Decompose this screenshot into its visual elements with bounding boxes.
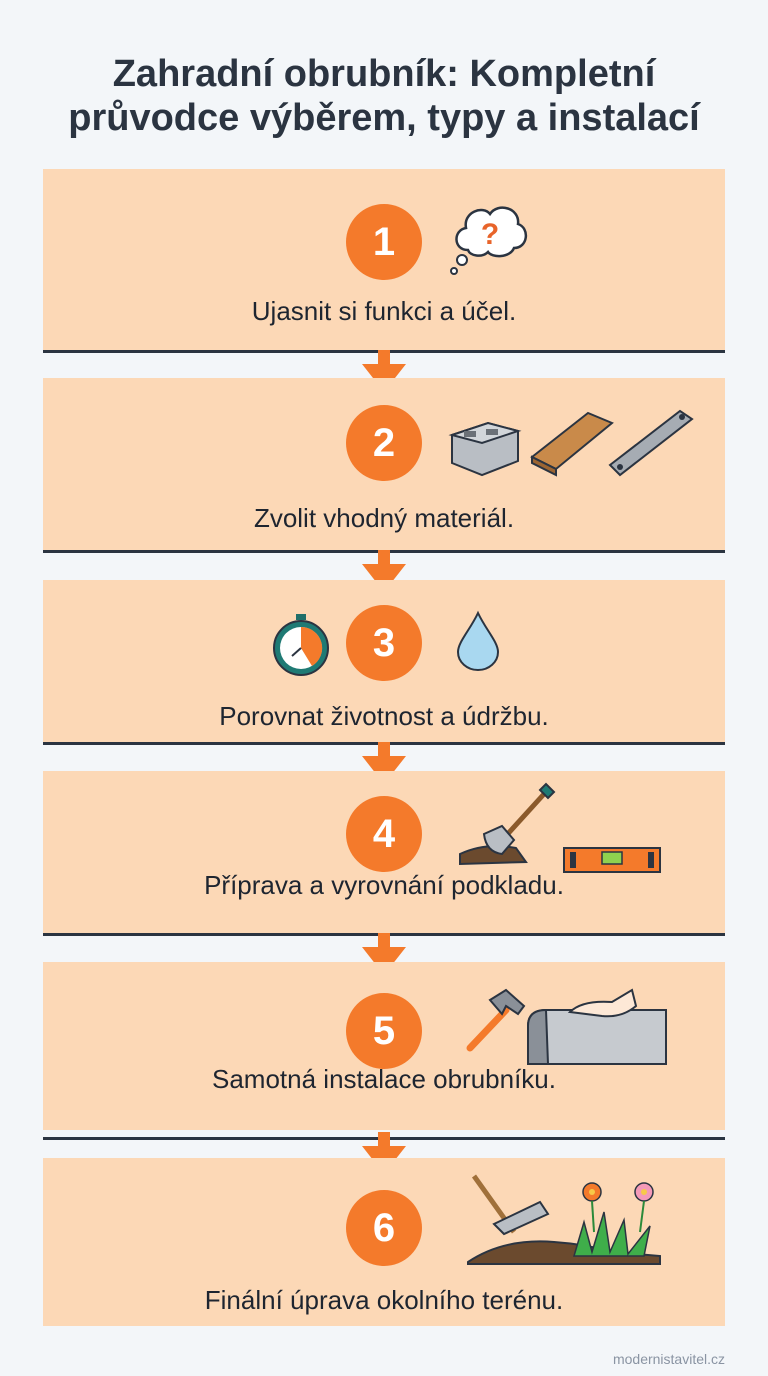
text 5: Samotná instalace obrubníku. bbox=[212, 1064, 556, 1094]
panel: step 2 bbox=[43, 378, 725, 550]
badge 6: 6 bbox=[373, 1206, 395, 1250]
title: Zahradní obrubník: Kompletní bbox=[113, 53, 655, 95]
icon: water drop bbox=[457, 610, 499, 671]
badge 1 bbox=[346, 204, 422, 280]
arrow 4 bbox=[362, 933, 406, 962]
panel: step 1 bbox=[43, 169, 725, 350]
arrow 2 bbox=[362, 550, 406, 580]
panel: step 5 bbox=[43, 962, 725, 1130]
text 4: Příprava a vyrovnání podkladu. bbox=[204, 870, 564, 900]
badge 4: 4 bbox=[373, 812, 395, 856]
panel: step 6 bbox=[43, 1158, 725, 1326]
arrow 1 bbox=[362, 350, 406, 378]
panel: step 3 bbox=[43, 580, 725, 742]
badge 4 bbox=[346, 796, 422, 872]
title: průvodce výběrem, typy a instalací bbox=[68, 97, 700, 139]
icon: stopwatch bbox=[273, 614, 329, 676]
badge 6 bbox=[346, 1190, 422, 1266]
footer: modernistavitel.cz bbox=[613, 1351, 725, 1367]
icon: thought bubble: ? bbox=[481, 218, 499, 251]
text 2: Zvolit vhodný materiál. bbox=[254, 503, 514, 533]
badge 3: 3 bbox=[373, 621, 395, 665]
text 6: Finální úprava okolního terénu. bbox=[205, 1285, 563, 1315]
badge 2 bbox=[346, 405, 422, 481]
icon: shovel and level bbox=[459, 782, 661, 873]
title bbox=[68, 53, 701, 139]
icon: hammer and curb bbox=[466, 988, 667, 1065]
badge 5 bbox=[346, 993, 422, 1069]
text 1: Ujasnit si funkci a účel. bbox=[252, 296, 516, 326]
badge 2: 2 bbox=[373, 421, 395, 465]
badge 1: 1 bbox=[373, 220, 395, 264]
arrow 3 bbox=[362, 742, 406, 771]
icon: thought bubble bbox=[450, 206, 528, 275]
panel: step 4 bbox=[43, 771, 725, 933]
arrow 5 bbox=[362, 1132, 406, 1158]
icon: materials bbox=[448, 410, 694, 477]
badge 5: 5 bbox=[373, 1009, 395, 1053]
text 3: Porovnat životnost a údržbu. bbox=[219, 701, 549, 731]
badge 3 bbox=[346, 605, 422, 681]
icon: rake and flowers bbox=[467, 1174, 661, 1265]
